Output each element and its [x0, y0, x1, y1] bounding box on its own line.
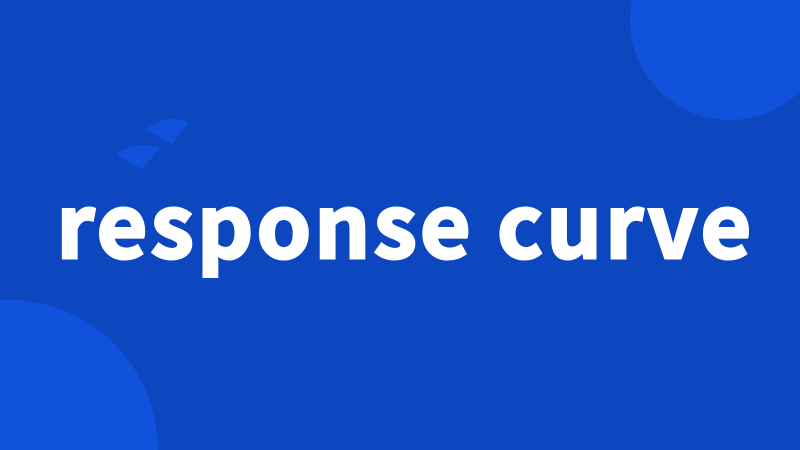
title: response curve	[56, 158, 755, 284]
decorative circle: top right	[630, 0, 800, 120]
decorative circle: bottom left	[0, 300, 158, 450]
icon: logo with two signal wedges	[116, 119, 189, 169]
